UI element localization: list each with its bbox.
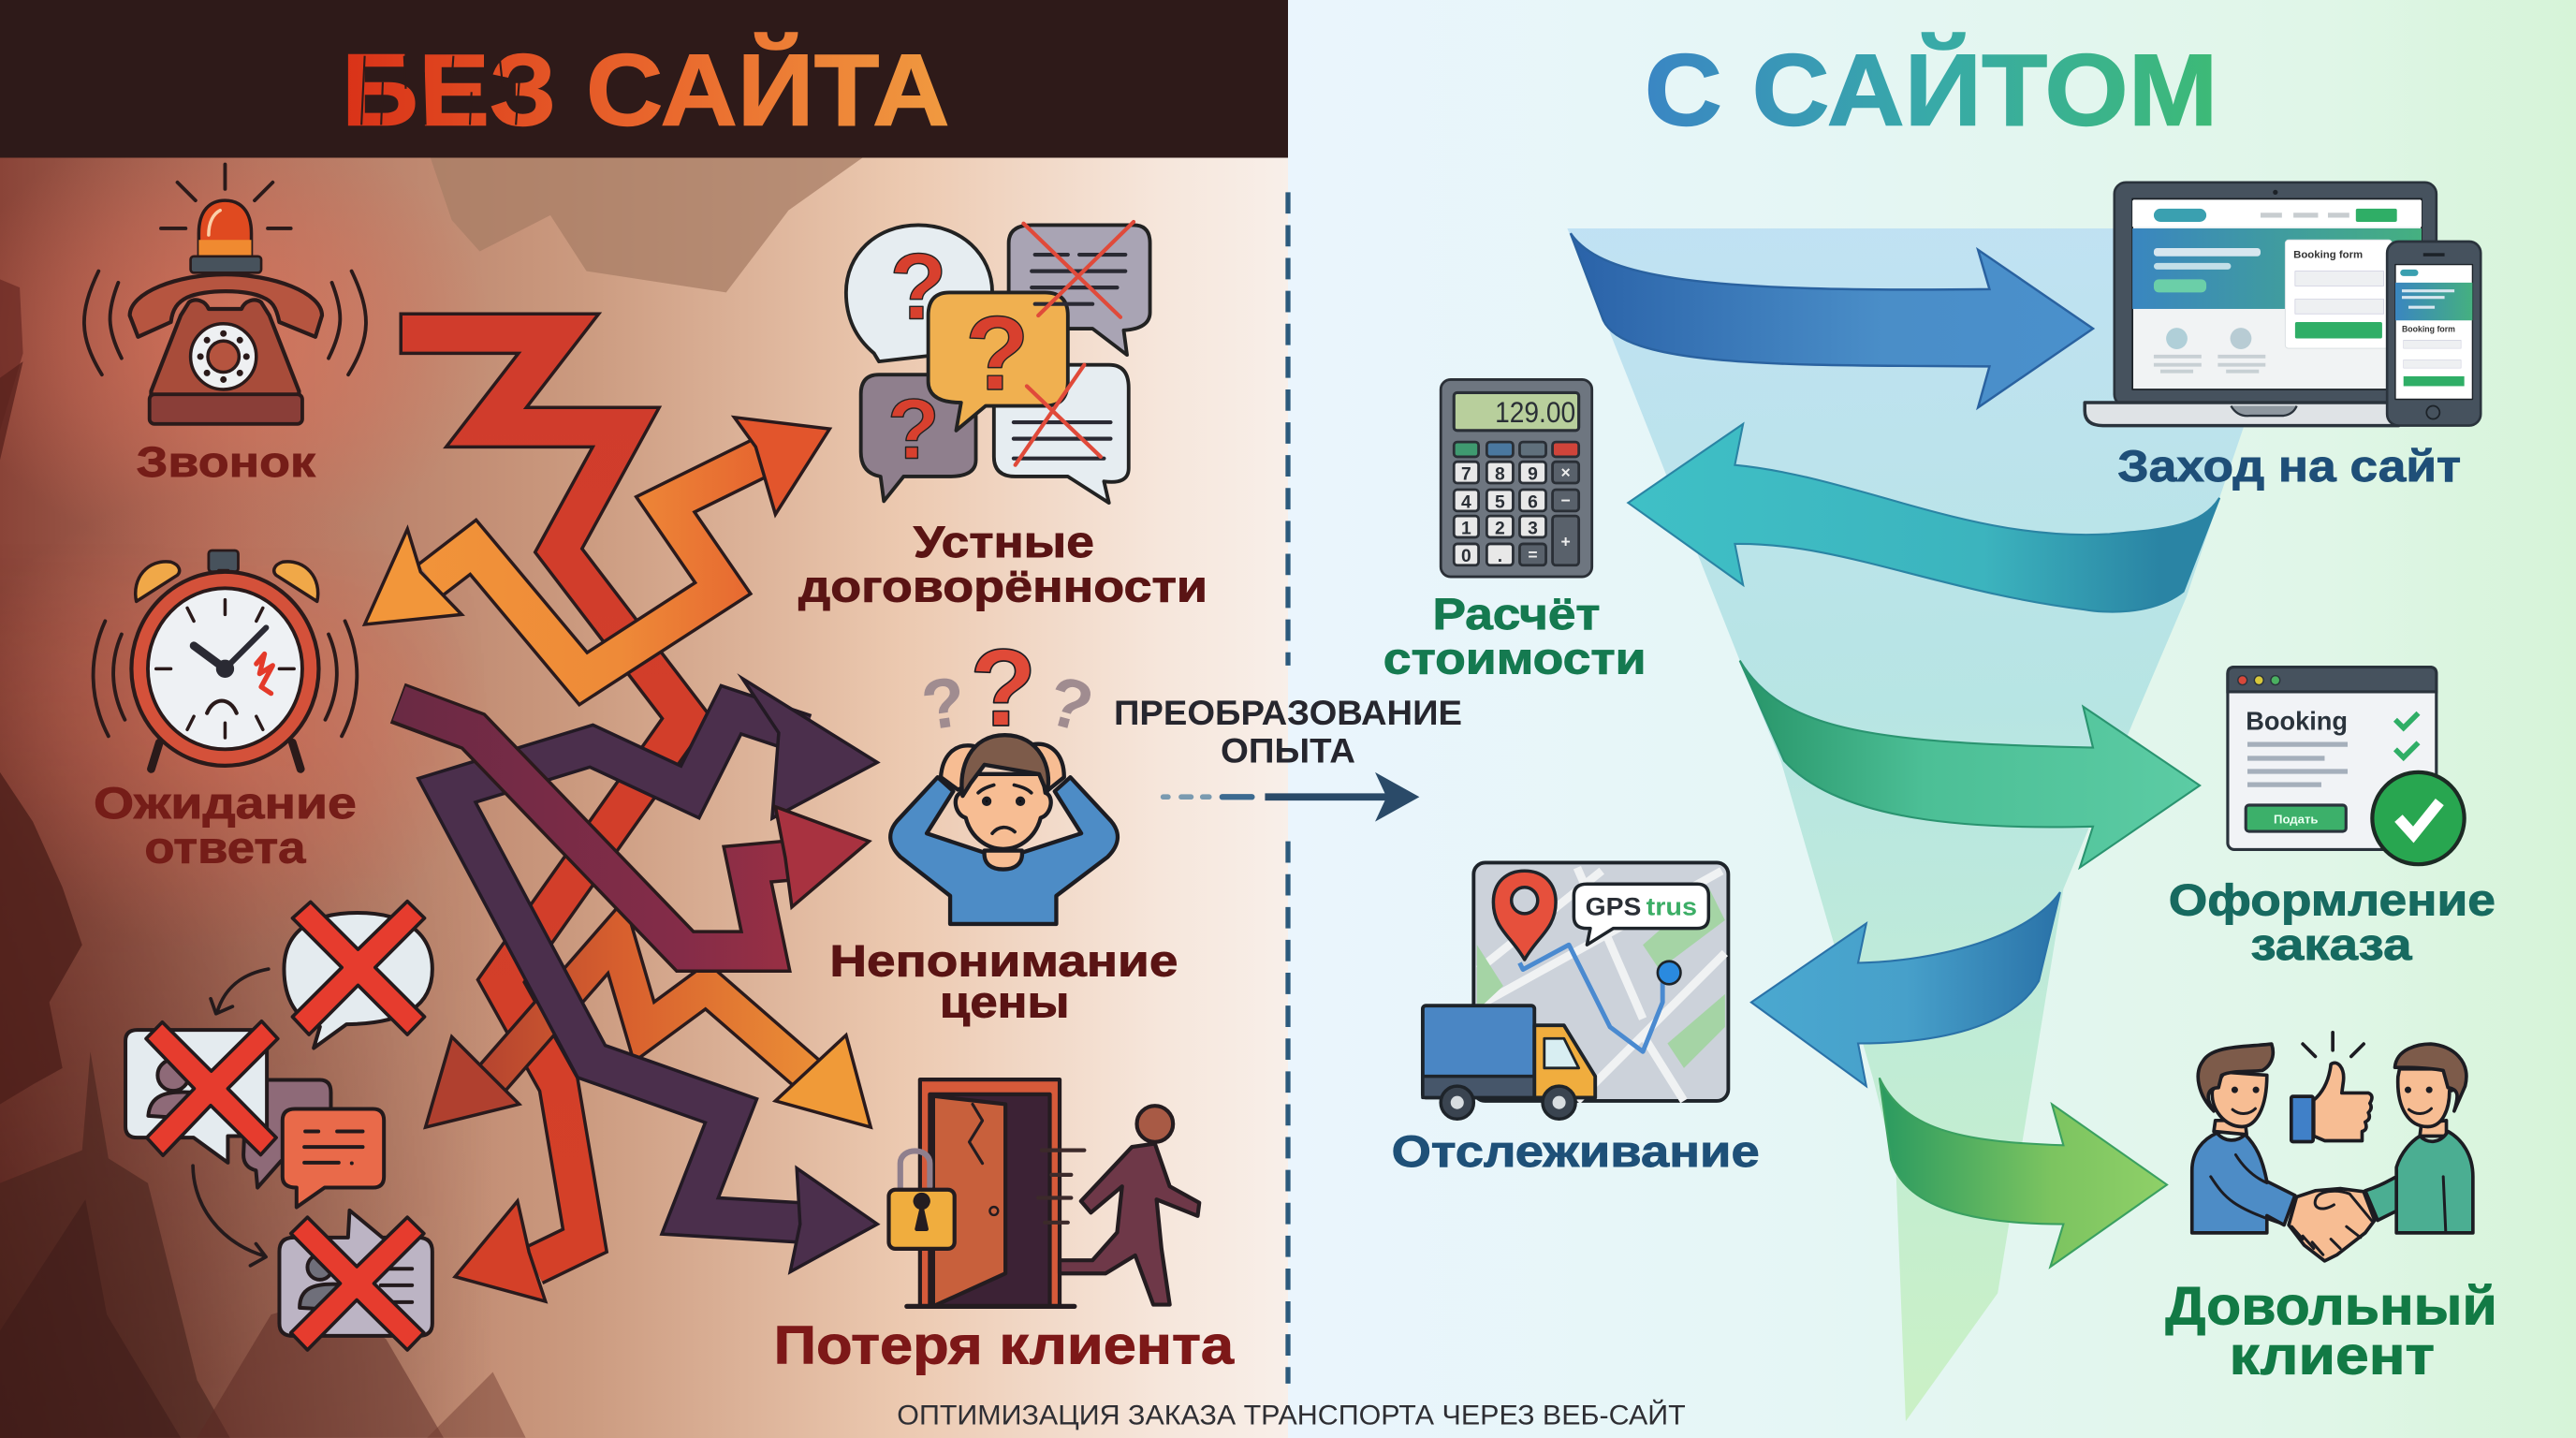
icon: confused person: ?: [970, 626, 1036, 749]
icon: calculator: 8: [1495, 464, 1505, 484]
label: order checkout: заказа: [2250, 920, 2412, 970]
icon: booking window: Booking: [2246, 706, 2348, 735]
icon: calculator: 4: [1461, 492, 1471, 512]
ribbon arrow: visit: [1571, 233, 2093, 407]
icon: tracking map and truck: [1423, 862, 1728, 1119]
label: satisfied client: Довольный: [2165, 1277, 2497, 1337]
icon: confused person: ?: [917, 661, 971, 745]
arrow: orange double-headed: [365, 418, 829, 679]
icon: calculator: 9: [1528, 464, 1538, 484]
label: waiting for reply: ответа: [144, 823, 306, 873]
icon: ringing phone: [84, 165, 366, 424]
arrow: red zigzag: [399, 333, 687, 1301]
icon: calculator: 6: [1528, 492, 1538, 512]
label: verbal agreements: Устные: [914, 518, 1094, 567]
label: cost calculation: [1383, 590, 1647, 684]
label: price confusion: цены: [940, 977, 1070, 1027]
arrow: dark purple double-headed: [446, 679, 877, 1271]
icon: confused person: [890, 626, 1118, 924]
label: order checkout: Оформление: [2169, 876, 2496, 926]
panel: without website background: [0, 157, 1288, 1438]
icon: booking window: Подать: [2274, 812, 2319, 826]
label: satisfied client: [2165, 1277, 2497, 1386]
icon: calculator: 5: [1495, 492, 1505, 512]
label: price confusion: [829, 937, 1178, 1027]
icon: booking window: [2228, 668, 2465, 864]
icon: door and running person: [889, 1079, 1199, 1306]
icon: calculator: =: [1528, 545, 1538, 564]
icon: calculator: 2: [1495, 519, 1505, 538]
label: experience transformation: ОПЫТА: [1221, 731, 1355, 770]
label: waiting for reply: [94, 779, 357, 873]
icon: calculator: ×: [1560, 463, 1571, 482]
icon: calculator: [1441, 379, 1592, 577]
label: experience transformation: ПРЕОБРАЗОВАНИЕ: [1114, 694, 1462, 732]
icon: confused person: ?: [1040, 660, 1102, 747]
icon: calculator: +: [1560, 532, 1571, 550]
icon: calculator: 3: [1528, 519, 1538, 538]
arrow: rust and orange double-headed: [426, 936, 871, 1127]
arrow: maroon: [398, 703, 869, 951]
ribbon arrow: satisfied client: [1880, 1078, 2167, 1267]
icon: calculator: .: [1498, 547, 1502, 566]
icon: speech bubbles with question marks: ?: [890, 234, 947, 339]
icon: speech bubbles with question marks: ?: [965, 294, 1030, 412]
icon: calculator: −: [1560, 492, 1571, 510]
icon: laptop and phone: Booking form: [2293, 250, 2363, 261]
icon: tracking map and truck: GPS: [1586, 892, 1641, 921]
icon: handshake people: [2192, 1033, 2473, 1261]
label: order checkout: [2169, 876, 2496, 970]
label: experience transformation: [1114, 694, 1462, 770]
icon: speech bubbles with question marks: ?: [887, 382, 940, 477]
icon: calculator: 1: [1461, 519, 1471, 538]
label: waiting for reply: Ожидание: [94, 779, 357, 829]
header bar: [0, 0, 1288, 157]
label: cost calculation: Расчёт: [1432, 590, 1600, 639]
icon: calculator: 0: [1461, 547, 1471, 566]
icon: speech bubbles with question marks: [846, 222, 1150, 503]
icon: laptop and phone: [2085, 183, 2481, 426]
divider: [1286, 192, 1290, 1384]
icon: calculator: 129.00: [1495, 395, 1575, 429]
funnel: [1567, 228, 2300, 1421]
label: call: Звонок: [137, 438, 315, 486]
label: cost calculation: стоимости: [1383, 635, 1647, 684]
label: satisfied client: клиент: [2230, 1326, 2435, 1386]
label: website visit: Заход на сайт: [2117, 442, 2461, 492]
ribbon arrow: calculation: [1628, 424, 2219, 612]
label: verbal agreements: договорённости: [798, 562, 1208, 611]
label: price confusion: Непонимание: [829, 937, 1178, 987]
icon: calculator: 7: [1461, 464, 1471, 484]
title: with website: С САЙТОМ: [1645, 31, 2217, 147]
label: client loss: Потеря клиента: [774, 1316, 1235, 1376]
ribbon arrow: tracking: [1751, 892, 2060, 1086]
panel: with website background: [1288, 0, 2576, 1438]
arrow: transformation: [1164, 772, 1419, 822]
label: verbal agreements: [798, 518, 1208, 611]
title: without website: БЕЗ САЙТА: [342, 31, 949, 147]
icon: tracking map and truck: trus: [1647, 892, 1697, 921]
ribbon arrow: checkout: [1740, 661, 2200, 868]
icon: crossed chat bubbles: [125, 902, 432, 1350]
label: tracking: Отслеживание: [1392, 1127, 1760, 1177]
footer caption: ОПТИМИЗАЦИЯ ЗАКАЗА ТРАНСПОРТА ЧЕРЕЗ ВЕБ-САЙТ: [897, 1400, 1686, 1431]
icon: alarm clock: [94, 550, 357, 769]
icon: laptop and phone: Booking form: [2402, 325, 2455, 334]
